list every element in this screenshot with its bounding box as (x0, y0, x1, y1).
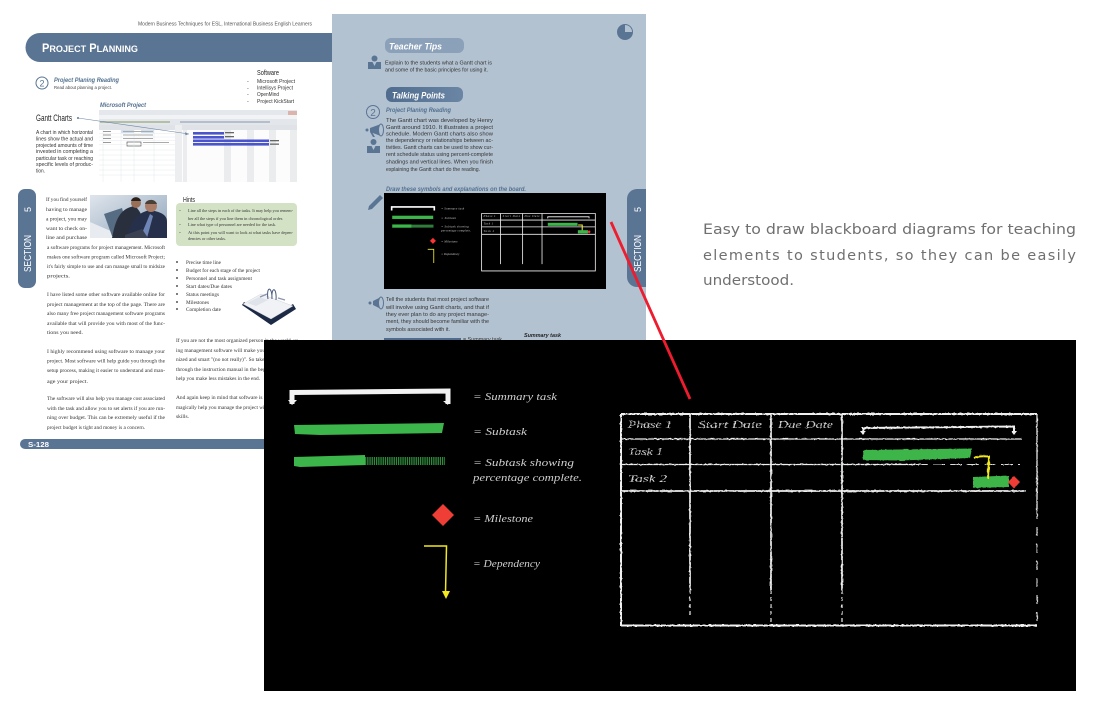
icon: desk calendar (242, 289, 296, 325)
closing paragraphs: ing management software will make you look very orga- (176, 347, 300, 354)
body text column: project management at the top of the page. There are (47, 301, 166, 308)
chart: task 1 bar (863, 448, 972, 460)
running header: Modern Business Techniques for ESL, International Business English Learners (138, 22, 312, 28)
hints box (176, 203, 297, 246)
bullet list: Personnel and task assignment (186, 276, 252, 282)
caption: elements to students, so they can be easily (703, 248, 1076, 264)
thumbnail blackboard: Task 1 (484, 221, 494, 225)
hints box: - (179, 222, 181, 228)
legend: summary task bracket (288, 391, 449, 405)
Gantt chart table: Start Date (698, 419, 762, 431)
software list: - (247, 92, 249, 98)
body text column: setup process, making it easier to understand and man- (47, 368, 165, 374)
Gantt chart table: Task 2 (628, 473, 668, 485)
talking points paragraph (386, 118, 494, 173)
Gantt chart definition: specific levels of produc- (36, 162, 93, 168)
software list: Microsoft Project (257, 79, 295, 85)
legend: dependency arrow (424, 546, 450, 599)
body text column: I have listed some other software available online for (47, 291, 165, 298)
Gantt chart definition: lines show the actual and (36, 136, 93, 142)
body text column: a software programs for project management. Microsoft (47, 244, 165, 251)
talking points paragraph: The Gantt chart was developed by Henry (386, 118, 493, 124)
teacher tip text: Explain to the students what a Gantt chart is (385, 60, 492, 66)
chart: task 2 bar (973, 476, 1009, 488)
hints heading: Hints (183, 197, 195, 204)
closing paragraphs: nized and smart "(no not really)". So take some time to go (176, 356, 300, 363)
hints box: Line what type of personnel are needed for the task. (188, 222, 276, 227)
talking points paragraph: Gantt around 1910. It illustrates a project (386, 125, 494, 131)
talking points paragraph: shadings and vertical lines. When you finish (386, 160, 493, 166)
Gantt chart definition (36, 130, 93, 174)
legend labels: = Summary task (473, 391, 558, 403)
caption (703, 222, 1076, 289)
talking points paragraph: tivities. Gantt charts can be used to show cur- (386, 145, 493, 151)
chart: dependency arrow (974, 456, 989, 479)
reading instruction: Read about planning a project. (54, 85, 112, 91)
body text column (46, 196, 166, 431)
summary task label: = Summary task (463, 337, 502, 343)
hints box: - (179, 208, 181, 214)
icon: megaphone (366, 124, 384, 137)
right section tab: SECTION (633, 235, 644, 272)
body text column: project. Most software will help guide you through the (47, 358, 165, 364)
legend labels: percentage complete. (472, 472, 582, 484)
teacher tip text (385, 60, 492, 74)
software list: Software (257, 68, 279, 77)
bullet list: Budget for each stage of the project (186, 267, 260, 274)
Gantt chart definition: tion. (36, 168, 45, 174)
body text column: makes one software program called Microsoft Project; (47, 254, 165, 260)
icon: teacher (368, 56, 381, 69)
icon: numbered circle 2 (366, 106, 380, 119)
Gantt chart definition: particular task or reaching (36, 156, 93, 162)
chart: milestone diamond (1008, 476, 1020, 488)
software list: - (247, 86, 249, 92)
page footer bar (20, 439, 300, 449)
legend labels: = Milestone (473, 513, 533, 525)
Teacher Tips pill: Teacher Tips (389, 42, 442, 52)
title banner (26, 33, 332, 62)
closing teacher note: they ever plan to do any project manage- (386, 312, 489, 318)
body text column: it's fairly simple to use and can manage small to midsize (47, 263, 165, 270)
chart: summary bracket (860, 426, 1017, 435)
software list: Project KickStart (257, 99, 294, 105)
closing teacher note: Tell the students that most project software (386, 297, 489, 303)
icon: numbered circle 2: 2 (39, 78, 45, 88)
closing teacher note: ment, they should become familiar with the (386, 319, 489, 325)
left section tab: SECTION (23, 235, 34, 272)
body text column: line and purchase (46, 235, 88, 241)
closing paragraphs: magically help you manage the project without some basic (176, 405, 300, 411)
reading heading: Project Planing Reading (54, 78, 119, 84)
thumbnail blackboard: percentage complete. (440, 229, 471, 233)
legend labels: = Subtask (473, 426, 528, 438)
closing paragraphs (176, 337, 300, 420)
thumbnail blackboard: Due Date (524, 214, 540, 218)
bullet list: Start dates/Due dates (186, 284, 232, 290)
board instruction heading: Draw these symbols and explanations on the board. (386, 187, 526, 193)
closing paragraphs: through the instruction manual in the beginning, this will (176, 367, 300, 373)
software list: - (247, 99, 249, 105)
thumbnail blackboard (384, 193, 606, 289)
Gantt chart definition: invested in completing a (36, 149, 93, 155)
Gantt chart table (621, 414, 1037, 626)
bullet list: Completion date (186, 307, 221, 313)
hints box: dencies or other tasks. (188, 236, 226, 241)
Gantt Charts heading with pointer: Gantt Charts (36, 113, 72, 123)
Teacher Tips pill (385, 38, 464, 53)
thumbnail blackboard: = Summary task (441, 206, 465, 210)
thumbnail blackboard: = Milestone (441, 240, 458, 244)
closing paragraphs: skills. (176, 414, 190, 420)
thumbnail blackboard: = Dependency (441, 252, 460, 256)
arrow: red pointer line (611, 222, 690, 399)
icon: quarter clock (617, 24, 633, 40)
bullet list: Status meetings (186, 292, 219, 298)
legend labels (472, 391, 582, 570)
Gantt chart table: Phase 1 (627, 419, 672, 431)
talking points paragraph: explaining the Gantt chart do the reading. (386, 167, 480, 173)
body text column: a project, you may (46, 216, 87, 222)
bullet list (176, 260, 260, 313)
closing paragraphs: If you are not the most organized person in the world, us- (176, 337, 300, 344)
Gantt chart table: Due Date (777, 419, 833, 431)
talking points paragraph: schedule. Modern Gantt charts also show (386, 132, 493, 138)
icon: megaphone (368, 297, 384, 309)
thumbnail blackboard: = Subtask (441, 216, 457, 220)
legend labels: = Subtask showing (473, 457, 575, 469)
body text column: The software will also help you manage cost associated (47, 395, 165, 402)
body text column: tions you need. (47, 330, 84, 336)
body text column: with the task and allow you to set alerts if you are run- (47, 405, 165, 412)
body text column: having to manage (46, 207, 88, 213)
hints box: ber all the steps if you line them in chronological order. (188, 216, 283, 221)
body text column: also many free project management software programs (47, 310, 165, 317)
left section tab: 5 (23, 207, 33, 212)
legend: milestone diamond (432, 504, 454, 526)
teacher tip text: and some of the basic principles for using it. (385, 68, 488, 74)
closing teacher note: will involve using Gantt charts, and that if (385, 305, 490, 311)
talking points paragraph: the dependency or relationships between ac- (386, 138, 493, 144)
icon: teacher (367, 139, 380, 153)
icon: numbered circle 2: 2 (370, 108, 376, 119)
thumbnail blackboard: Task 2 (484, 229, 495, 233)
closing teacher note (385, 297, 490, 333)
Gantt chart table: Task 1 (628, 446, 663, 458)
body text column: available that will provide you with most of the func- (47, 320, 165, 327)
Talking Points pill: Talking Points (392, 90, 445, 102)
software list: Intellisys Project (257, 86, 293, 92)
legend: subtask with percentage complete (294, 455, 445, 467)
screenshot heading: Microsoft Project (100, 103, 147, 109)
bullet list: Milestones (186, 300, 209, 306)
body text column: I highly recommend using software to manage your (47, 348, 165, 355)
talking points paragraph: rent schedule status using percent-complete (386, 152, 493, 158)
caption: Easy to draw blackboard diagrams for teaching (703, 222, 1076, 238)
screenshot: Microsoft Project window (99, 110, 297, 182)
hints box: At this point you will want to look at what tasks have depen- (188, 230, 293, 235)
panel: right book page teacher notes (332, 14, 646, 344)
right section tab: 5 (633, 207, 643, 212)
caption: understood. (703, 273, 794, 289)
closing teacher note: symbols associated with it. (386, 327, 450, 333)
software list: OpenMind (257, 92, 279, 98)
body text column: age your project. (47, 379, 89, 385)
Talking Points pill (386, 87, 463, 102)
body text column: projects. (47, 274, 71, 280)
software list (247, 68, 295, 105)
left section tab (18, 189, 36, 288)
thumbnail blackboard: Phase 1 (483, 214, 496, 218)
right section tab (627, 189, 646, 287)
summary task heading: Summary task (524, 333, 562, 339)
Gantt Charts heading with pointer (36, 113, 189, 135)
thumbnail blackboard: = Subtask showing (441, 224, 469, 228)
thumbnail blackboard: Start Date (503, 214, 521, 218)
closing paragraphs: And again keep in mind that software is a tool; it will not (176, 394, 300, 401)
body text column: ning over budget. This can be extremely useful if the (47, 414, 166, 421)
icon: numbered circle 2 (36, 77, 48, 89)
legend: subtask bar (294, 423, 444, 435)
legend labels: = Dependency (473, 558, 540, 570)
page footer bar: S-128 (28, 442, 49, 449)
hints box: Line all the steps in each of the tasks. It may help you remem- (188, 208, 293, 213)
bullet list: Precise time line (186, 260, 221, 266)
icon: pencil (368, 195, 383, 210)
talking points heading: Project Planing Reading (386, 108, 451, 114)
body text column: want to check on- (46, 226, 87, 232)
closing paragraphs: help you make less mistakes in the end. (176, 376, 261, 382)
software list: - (247, 79, 249, 85)
title: PROJECT PLANNING (42, 43, 138, 55)
body text column: If you find yourself (46, 196, 87, 203)
Gantt chart definition: projected amounts of time (36, 143, 93, 149)
summary task bar (384, 338, 461, 344)
hints box: - (179, 230, 181, 236)
photo: two businessmen at a laptop (90, 195, 167, 238)
enlarged blackboard diagram (264, 340, 1076, 691)
Gantt chart definition: A chart in which horizontal (36, 130, 93, 136)
panel: left book page (18, 22, 332, 449)
body text column: project budget is tight and money is a concern. (47, 425, 146, 431)
